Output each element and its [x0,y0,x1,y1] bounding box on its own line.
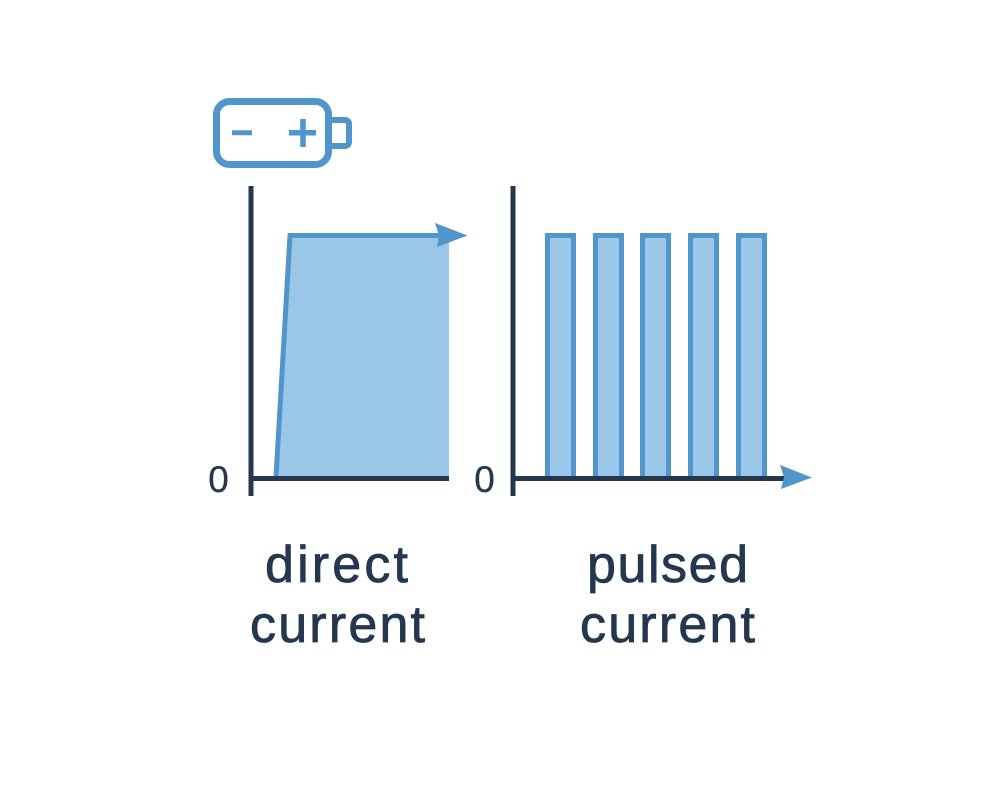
label: direct current: direct [265,536,409,594]
direct current edge line and arrow [276,223,468,477]
direct current filled area [276,236,449,478]
label: pulsed current: pulsed [587,536,748,594]
chart: pulsed current [474,186,812,500]
direct current zero label: 0 [208,459,229,500]
pulsed current arrow [780,465,812,489]
chart: direct current [208,186,468,500]
label: direct current [250,536,426,654]
label: direct current: current [250,596,426,654]
pulsed current axes [513,186,785,496]
pulsed current zero label: 0 [474,459,495,500]
label: pulsed current [580,536,756,654]
direct current axes [251,186,449,496]
icon: battery [216,102,349,164]
label: pulsed current: current [580,596,756,654]
pulses [548,236,764,478]
